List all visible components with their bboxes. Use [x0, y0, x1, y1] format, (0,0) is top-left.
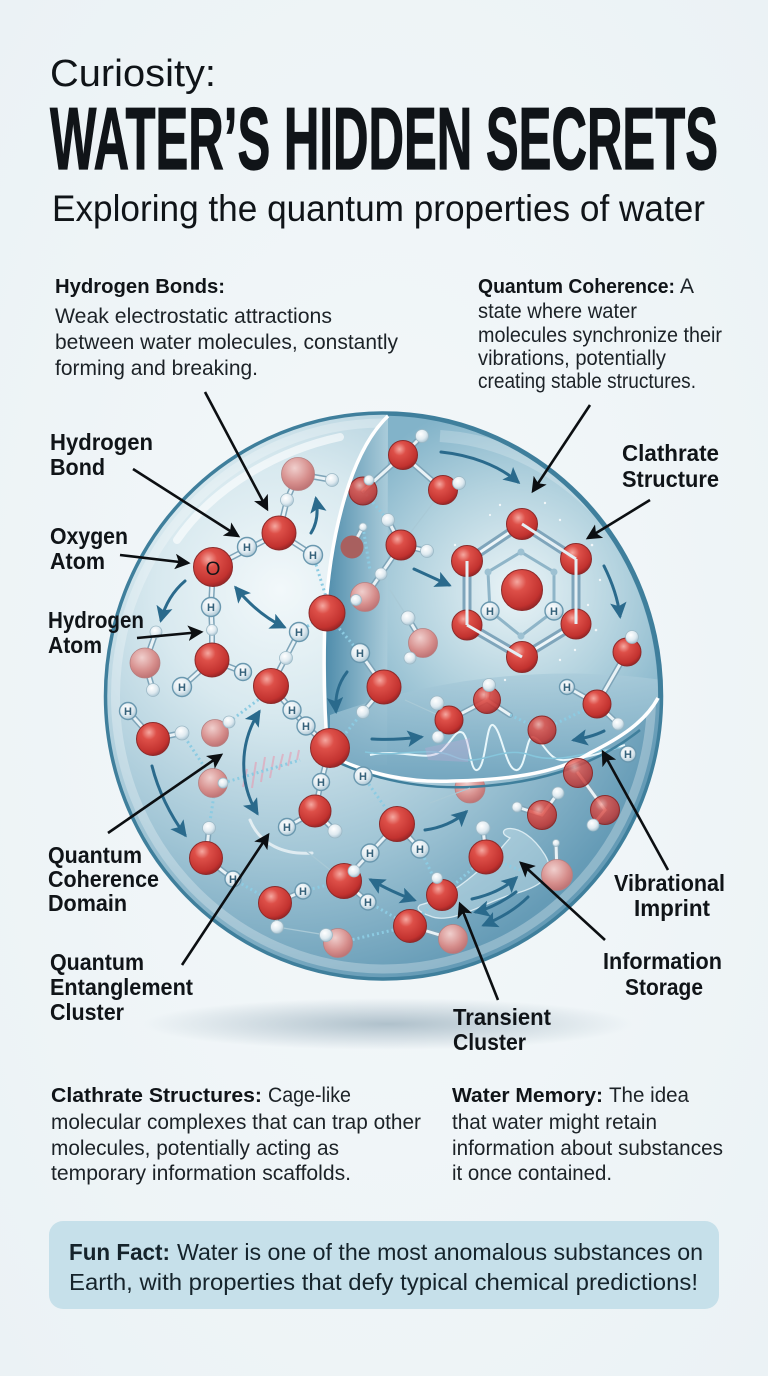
coherence wake: [250, 820, 312, 853]
sphere highlight: [177, 437, 340, 540]
label: information storage: [603, 948, 722, 1000]
label: hydrogen atom: [48, 607, 144, 658]
arrow: hydrogen atom: [137, 632, 201, 638]
text block: hydrogen bonds: [55, 275, 398, 380]
molecules in the lower and left region: H: [288, 705, 296, 717]
arrow: clathrate: [588, 500, 650, 538]
fun fact callout: Fun Fact:: [69, 1239, 170, 1265]
text block: quantum coherence: creating stable structures.: [478, 370, 696, 393]
inner top reflection: [440, 430, 592, 514]
text block: quantum coherence: state where water: [478, 300, 637, 323]
cutaway interior: [324, 414, 662, 790]
vibrational wave: [365, 725, 625, 770]
label: oxygen atom: [50, 523, 128, 574]
text block: clathrate structures: molecular complexes that can trap other: [51, 1111, 421, 1134]
label: quantum coherence domain: [48, 842, 159, 916]
text block: hydrogen bonds: forming and breaking.: [55, 357, 258, 380]
arrow: entanglement cluster: [182, 835, 268, 965]
arrow: transient cluster: [460, 904, 498, 1000]
text block: clathrate structures: [51, 1084, 421, 1185]
arrow: hydrogen bond: [133, 469, 238, 536]
label: vibrational imprint: Imprint: [634, 895, 710, 921]
text block: water memory: information about substances: [452, 1137, 723, 1160]
label: quantum coherence domain: Domain: [48, 890, 127, 916]
label: quantum entanglement cluster: [50, 949, 193, 1025]
label: information storage: Information: [603, 948, 722, 974]
molecules in the lower and left region: H: [364, 897, 372, 909]
clathrate structure: H: [550, 606, 558, 618]
label: vibrational imprint: Vibrational: [614, 870, 725, 896]
label: hydrogen atom: Atom: [48, 632, 102, 658]
cutaway edge: [324, 416, 658, 781]
molecules in the lower and left region: [120, 458, 636, 958]
pointer arrows: [108, 392, 668, 1000]
text block: water memory: it once contained.: [452, 1162, 612, 1185]
title block: [50, 53, 718, 229]
inner floor: [330, 674, 658, 780]
molecules in the lower and left region: H: [302, 721, 310, 733]
arrow: oxygen atom: [120, 555, 188, 563]
storage bubble: [418, 828, 549, 918]
clathrate sparkle: [454, 502, 601, 681]
molecules in the lower and left region: H: [366, 848, 374, 860]
molecules in the lower and left region: H: [239, 667, 247, 679]
clathrate structure: H: [486, 606, 494, 618]
molecules in the lower and left region: H: [309, 550, 317, 562]
sphere ground shadow: [143, 998, 633, 1050]
subtitle: Exploring the quantum properties of water: [52, 188, 705, 229]
molecules in the lower and left region: H: [317, 777, 325, 789]
arrow: information storage: [521, 863, 605, 940]
label: information storage: Storage: [625, 974, 703, 1000]
label: quantum entanglement cluster: Quantum: [50, 949, 144, 975]
text block: quantum coherence: A: [680, 275, 694, 298]
fun fact callout: [49, 1221, 719, 1309]
molecules inside the cutaway: [332, 430, 641, 744]
label: clathrate structure: Structure: [622, 466, 719, 492]
blue flow arrows: [152, 452, 620, 925]
text block: clathrate structures: molecules, potentially acting as: [51, 1137, 339, 1160]
molecules in the lower and left region: H: [229, 874, 237, 886]
text block: clathrate structures: Clathrate Structures:: [51, 1084, 262, 1107]
cage inner struts: [488, 552, 554, 636]
label: transient cluster: Cluster: [453, 1029, 526, 1055]
text block: quantum coherence: Quantum Coherence:: [478, 275, 675, 298]
sphere body: [106, 413, 662, 979]
arrow: hydrogen bonds: [205, 392, 267, 509]
label: quantum coherence domain: Quantum: [48, 842, 142, 868]
label: clathrate structure: Clathrate: [622, 440, 719, 466]
label: quantum coherence domain: Coherence: [48, 866, 159, 892]
text block: quantum coherence: vibrations, potentially: [478, 347, 666, 370]
label: transient cluster: Transient: [453, 1004, 551, 1030]
clathrate structure: [452, 502, 601, 681]
molecules in the lower and left region: H: [624, 749, 632, 761]
arrow: coherence domain: [108, 755, 221, 833]
label: clathrate structure: [622, 440, 719, 492]
molecules in the lower and left region: H: [124, 706, 132, 718]
label: quantum entanglement cluster: Cluster: [50, 999, 124, 1025]
label: quantum entanglement cluster: Entanglement: [50, 974, 193, 1000]
text block: clathrate structures: temporary information scaffolds.: [51, 1162, 351, 1185]
label: oxygen atom: Atom: [50, 548, 105, 574]
molecules in the lower and left region: H: [207, 602, 215, 614]
molecules in the lower and left region: H: [359, 771, 367, 783]
water sphere diagram: [106, 413, 662, 979]
label: hydrogen bond: Hydrogen: [50, 429, 153, 455]
labelled oxygen atom: O: [206, 559, 220, 580]
sphere inner ring: [116, 423, 652, 969]
molecules inside the cutaway: H: [563, 682, 571, 694]
label: oxygen atom: Oxygen: [50, 523, 128, 549]
labelled oxygen atom: [194, 548, 232, 586]
arrow: quantum coherence: [533, 405, 590, 491]
text block: hydrogen bonds: between water molecules, constantly: [55, 331, 398, 354]
text block: quantum coherence: [478, 275, 722, 393]
entanglement pink wave: [243, 750, 299, 788]
cage outer struts: [467, 524, 576, 657]
label: vibrational imprint: [614, 870, 725, 921]
label: hydrogen bond: [50, 429, 153, 480]
molecules in the lower and left region: H: [178, 682, 186, 694]
label: hydrogen bond: Bond: [50, 454, 105, 480]
arrow: vibrational imprint: [603, 752, 668, 870]
text block: water memory: that water might retain: [452, 1111, 657, 1134]
molecules in the lower and left region: H: [243, 542, 251, 554]
text block: hydrogen bonds: Weak electrostatic attractions: [55, 305, 332, 328]
text block: water memory: [452, 1084, 723, 1185]
text block: quantum coherence: molecules synchronize their: [478, 324, 722, 347]
text block: water memory: The idea: [609, 1084, 689, 1107]
label: hydrogen atom: Hydrogen: [48, 607, 144, 633]
label: transient cluster: [453, 1004, 551, 1055]
inner wall band: [326, 416, 388, 728]
text block: hydrogen bonds: Hydrogen Bonds:: [55, 275, 225, 298]
fun fact callout: Earth, with properties that defy typical chemical predictions!: [69, 1269, 698, 1295]
molecules in the lower and left region: H: [295, 627, 303, 639]
molecules in the lower and left region: H: [416, 844, 424, 856]
molecules inside the cutaway: H: [356, 648, 364, 660]
molecules behind the cutaway: [430, 773, 485, 803]
text block: water memory: Water Memory:: [452, 1084, 603, 1107]
cutaway lower rim shadow: [333, 730, 640, 787]
heading: Curiosity: Curiosity:: [50, 53, 216, 95]
molecules in the lower and left region: H: [299, 886, 307, 898]
fun fact callout: Water is one of the most anomalous substances on: [177, 1239, 703, 1265]
text block: clathrate structures: Cage-like: [268, 1084, 351, 1107]
molecules in the lower and left region: H: [283, 822, 291, 834]
